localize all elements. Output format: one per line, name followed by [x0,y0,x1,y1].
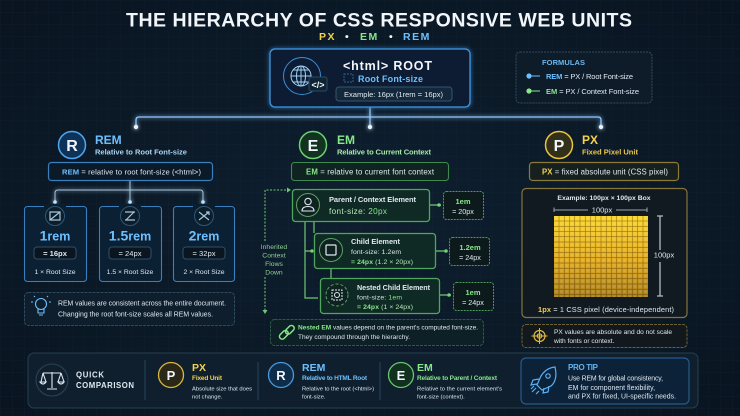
rem note with lightbulb: REM values are consistent across the entire document. [58,301,226,308]
em badge and heading [300,132,431,158]
comparison: REM: Relative to the root (<html>) [302,387,374,393]
box: parent element: font-size: 20px [329,207,387,216]
comparison: EM: EM [417,362,433,374]
value: child 1.2em: 1.2em [459,243,481,252]
formula: em: EM = PX / Context Font-size [546,87,639,96]
callout: pro tip: PRO TIP [568,363,599,372]
comparison: REM: R [276,368,286,383]
em note with link icon: They compound through the hierarchy. [298,334,410,341]
icon: globe with code tag: </> [311,80,325,90]
callout: pro tip: Use REM for global consistency, [568,376,663,383]
card: 1rem: 1 × Root Size [34,269,76,276]
card: 1.5rem: 1.5rem [109,228,151,244]
card: 1.5rem: 1.5 × Root Size [107,269,154,276]
heading: html root: <html> ROOT [343,59,432,73]
rem definition [48,162,212,180]
box: nested child element: font-size: 1em [357,294,402,302]
comparison: REM: font-size. [302,395,326,401]
box: child element: font-size: 1.2em [351,249,401,256]
card: 1rem: = 16px [43,249,68,258]
box: nested child element: = 24px (1 × 24px) [357,304,413,311]
subtitle: PX EM REM: EM [360,31,379,43]
px example box [522,188,687,318]
icon: globe with code tag [284,58,327,94]
label: quick comparison: COMPARISON [76,381,134,390]
px definition: PX = fixed absolute unit (CSS pixel) [542,168,668,176]
px badge and heading [546,132,638,158]
inherited context arrow and label: Down [265,270,283,276]
comparison: EM [388,362,502,401]
connector: root to three units [134,107,603,129]
comparison: EM: Relative to the current element's [417,387,502,393]
card: 2rem [174,204,234,282]
rem badge and heading: Relative to Root Font-size [95,148,187,157]
px note with target icon: with fonts or context. [553,338,615,345]
example pill [336,87,452,101]
subtitle: PX EM REM: REM [403,31,431,43]
value: child 1.2em: = 24px [459,253,481,262]
value: parent 1em [444,192,484,220]
comparison: PX: PX [192,362,206,374]
rem badge and heading: R [66,138,78,155]
pixel grid [554,216,648,297]
rem badge and heading: REM [95,133,122,147]
px note with target icon: PX values are absolute and do not scale [554,329,672,336]
comparison: PX: Fixed Unit [192,375,223,382]
subtitle: PX EM REM: • [389,31,394,43]
callout: pro tip: and PX for fixed, UI-specific needs. [568,394,676,401]
em note with link icon: Nested EM values depend on the parent's computed font-size. [298,324,478,332]
comparison: EM: font-size (context). [417,395,465,401]
box: nested child element: Nested Child Element [357,283,431,292]
rem note with lightbulb: Changing the root font-size scales all REM values. [58,312,213,319]
px note with target icon [522,324,687,348]
px example box: Example: 100px × 100px Box [557,195,651,202]
horizontal dimension: 100px [592,206,612,214]
rem definition: REM = relative to root font-size (<html>) [62,168,201,176]
horizontal dimension [554,206,647,214]
rem badge and heading [58,132,187,158]
panel: EM column [261,132,494,346]
em definition: EM = relative to current font context [306,168,435,176]
card: 2rem: 2rem [189,228,219,244]
em badge and heading: Relative to Current Context [337,148,431,157]
card: 1.5rem: = 24px [118,249,142,258]
em definition [292,162,448,180]
comparison: PX: P [167,368,176,383]
subtitle: PX EM REM [319,31,431,43]
card: 2rem: = 32px [192,249,216,258]
value: parent 1em: = 20px [452,207,474,216]
box: child element: Child Element [351,237,401,246]
inherited context arrow and label: Context [262,252,286,260]
px badge and heading: PX [582,133,598,147]
label: quick comparison: QUICK [76,371,104,380]
label: root font-size: Root Font-size [358,74,423,84]
rem connectors [53,181,205,204]
box: child element: = 24px (1.2 × 20px) [351,259,413,266]
comparison: REM: Relative to HTML Root [302,375,368,382]
card: 1.5rem [100,204,162,282]
box: parent element: Parent / Context Element [329,195,416,204]
inherited context arrow and label: Inherited [261,244,287,251]
px badge and heading: P [554,138,565,155]
comparison: EM: Relative to Parent / Context [417,375,498,382]
box: parent element [292,190,430,222]
callout: pro tip [521,358,689,404]
subtitle: PX EM REM: PX [319,31,336,43]
comparison: EM: E [397,368,406,383]
em tree connectors [305,204,451,298]
vertical dimension [654,216,674,296]
card: 2rem: 2 × Root Size [184,269,225,276]
example pill: Example: 16px (1rem = 16px) [344,90,443,99]
card: 1rem [24,204,86,282]
value: nested 1em: 1em [465,288,481,297]
comparison: PX: not change. [192,395,223,401]
panel: html root [270,49,470,107]
callout: pro tip: EM for component flexibility, [568,385,655,392]
px example box: 1px = 1 CSS pixel (device-independent) [538,305,674,314]
em badge and heading: EM [337,133,355,147]
comparison: REM: REM [302,362,326,374]
comparison: PX [158,362,252,401]
value: nested 1em: = 24px [462,298,484,307]
panel: REM column [24,132,234,326]
em badge and heading: E [308,138,319,155]
formula: rem: REM = PX / Root Font-size [546,72,633,81]
panel: PX column [522,132,687,348]
comparison: REM [268,362,374,401]
rem note with lightbulb [24,292,234,326]
subtitle: PX EM REM: • [345,31,350,43]
px badge and heading: Fixed Pixel Unit [582,148,638,157]
value: child 1.2em [450,238,490,266]
value: parent 1em: 1em [455,197,471,206]
value: nested 1em [454,282,494,310]
inherited context arrow and label: Flows [265,261,283,268]
box: nested child element [320,278,440,314]
panel: formulas [516,52,652,103]
inherited context arrow and label [261,188,291,314]
panel: formulas: FORMULAS [542,58,585,67]
comparison: PX: Absolute size that does [192,387,252,393]
vertical dimension: 100px [654,250,674,260]
panel: quick comparison [28,353,698,408]
em note with link icon [270,320,484,346]
box: child element [314,234,436,268]
icon: scales [36,364,68,396]
title: THE HIERARCHY OF CSS RESPONSIVE WEB UNITS [126,10,632,32]
px definition [530,162,678,180]
label: quick comparison [76,371,134,390]
card: 1rem: 1rem [40,228,70,244]
